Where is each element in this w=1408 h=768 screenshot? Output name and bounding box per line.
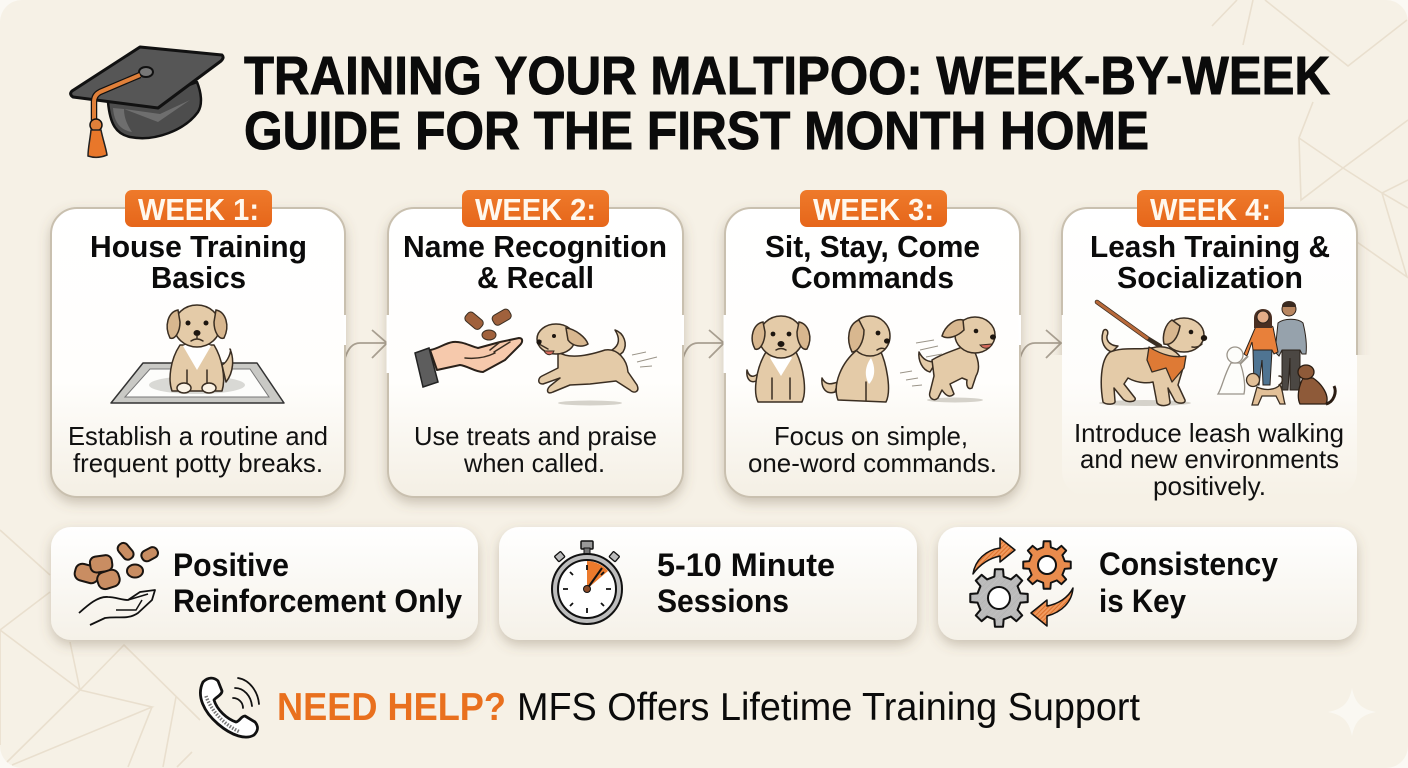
text: positive reinforcement: Reinforcement Only bbox=[173, 583, 462, 619]
week 2 description: when called. bbox=[463, 448, 605, 478]
white dog bbox=[1218, 347, 1248, 394]
week 3 description bbox=[748, 421, 997, 478]
text: positive reinforcement: Positive bbox=[173, 547, 289, 583]
woman bbox=[1244, 309, 1278, 385]
week 3 description: one-word commands. bbox=[748, 448, 997, 478]
week 3 heading: Commands bbox=[791, 260, 954, 295]
week 1 description: Establish a routine and bbox=[68, 421, 328, 451]
tan small dog bbox=[1246, 374, 1285, 405]
footer call to action: MFS Offers Lifetime Training Support bbox=[517, 686, 1140, 729]
icon: treats and hand bbox=[73, 541, 160, 625]
week 1 heading: Basics bbox=[151, 260, 246, 295]
illustration: couple with dogs bbox=[1218, 301, 1335, 405]
text: consistency: is Key bbox=[1099, 583, 1186, 619]
brown dog bbox=[1298, 365, 1335, 404]
arrow: week 3 to week 4 bbox=[1020, 330, 1061, 358]
week 4 heading: Socialization bbox=[1117, 260, 1303, 295]
illustration: sit puppy bbox=[747, 316, 810, 402]
icon: stopwatch bbox=[552, 541, 622, 624]
panel: week 3 bbox=[724, 190, 1021, 497]
illustration: puppy on training pad bbox=[111, 305, 284, 403]
panel: positive reinforcement bbox=[51, 527, 478, 640]
week 2 heading: Name Recognition bbox=[403, 229, 667, 264]
text: session length bbox=[657, 547, 835, 619]
text: session length: 5-10 Minute bbox=[657, 547, 835, 583]
text: positive reinforcement bbox=[173, 547, 462, 619]
week 2 heading bbox=[403, 229, 667, 295]
footer call to action: NEED HELP? bbox=[277, 686, 506, 729]
arrow: week 2 to week 3 bbox=[683, 330, 724, 358]
text: session length: Sessions bbox=[657, 583, 789, 619]
icon: graduation cap bbox=[71, 47, 223, 157]
week 2 heading: & Recall bbox=[477, 260, 594, 295]
title bbox=[244, 46, 1330, 161]
icon: gears and arrows bbox=[970, 538, 1073, 627]
text: consistency: Consistency bbox=[1099, 546, 1278, 582]
week 2 badge: WEEK 2: bbox=[475, 192, 596, 227]
week 3 heading bbox=[765, 229, 980, 295]
title: GUIDE FOR THE FIRST MONTH HOME bbox=[244, 101, 1149, 161]
week 4 description: Introduce leash walking bbox=[1074, 418, 1344, 448]
week 4 description bbox=[1074, 418, 1344, 501]
title: TRAINING YOUR MALTIPOO: WEEK-BY-WEEK bbox=[244, 46, 1330, 106]
week 4 badge: WEEK 4: bbox=[1150, 192, 1271, 227]
panel: consistency bbox=[938, 527, 1357, 640]
week 1 heading bbox=[90, 229, 307, 295]
week 4 description: and new environments bbox=[1080, 444, 1339, 474]
icon: telephone bbox=[200, 678, 259, 737]
week 1 heading: House Training bbox=[90, 229, 307, 264]
man bbox=[1275, 301, 1306, 390]
illustration: leashed dog with harness bbox=[1097, 302, 1207, 406]
arrow: week 1 to week 2 bbox=[345, 330, 387, 358]
week 1 badge: WEEK 1: bbox=[138, 192, 259, 227]
panel: week 4 bbox=[1062, 190, 1357, 501]
panel: session length bbox=[499, 527, 917, 640]
week 4 heading bbox=[1090, 229, 1330, 295]
week 3 heading: Sit, Stay, Come bbox=[765, 229, 980, 264]
illustration: treats in hand and running puppy bbox=[415, 308, 657, 406]
week 2 description: Use treats and praise bbox=[414, 421, 657, 451]
week 2 description bbox=[414, 421, 657, 478]
panel: week 1 bbox=[51, 190, 346, 497]
week 3 badge: WEEK 3: bbox=[813, 192, 934, 227]
week 1 description: frequent potty breaks. bbox=[73, 448, 323, 478]
week 3 description: Focus on simple, bbox=[774, 421, 968, 451]
text: consistency bbox=[1099, 546, 1278, 619]
icon: sparkle bbox=[1328, 688, 1376, 736]
illustration: come puppy bbox=[900, 317, 996, 402]
illustration: stay puppy bbox=[822, 316, 890, 402]
week 4 description: positively. bbox=[1153, 471, 1266, 501]
week 4 heading: Leash Training & bbox=[1090, 229, 1330, 264]
panel: week 2 bbox=[386, 190, 684, 497]
week 1 description bbox=[68, 421, 328, 478]
